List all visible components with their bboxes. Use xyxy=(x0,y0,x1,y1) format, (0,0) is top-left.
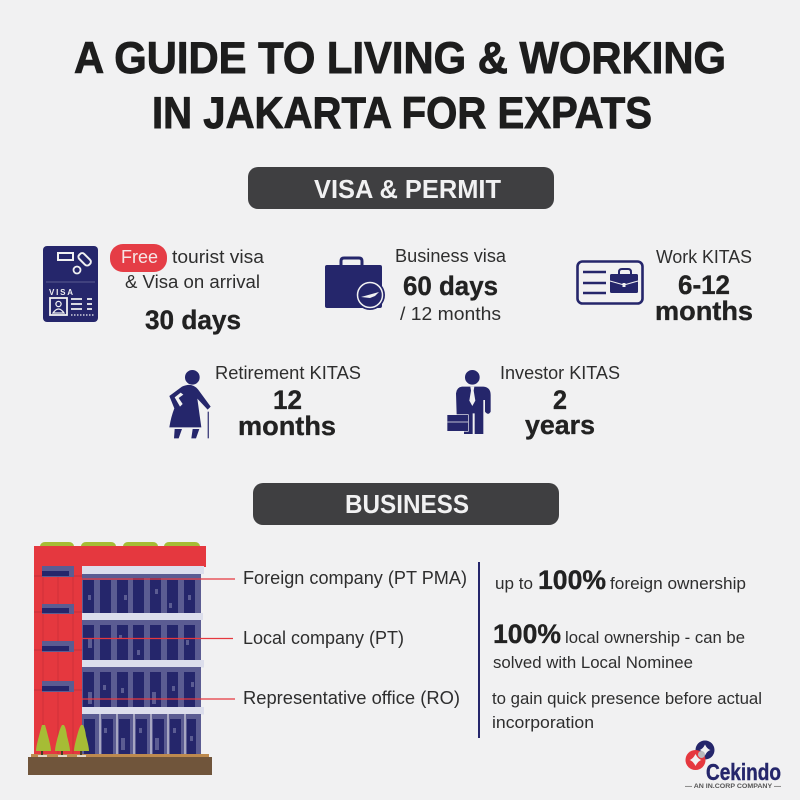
text block: work kitas: 6-12 xyxy=(678,270,730,300)
text block: local ownership xyxy=(493,619,745,672)
text block: representative office: to gain quick presence before actual xyxy=(492,689,762,708)
text block: investor kitas: Investor KITAS xyxy=(500,363,620,383)
text block: company types xyxy=(243,567,467,708)
heading: visa and permit xyxy=(248,167,554,209)
title xyxy=(74,34,726,138)
text block: free tourist visa: & Visa on arrival xyxy=(125,272,260,292)
text block: local ownership: local ownership - can be xyxy=(565,628,745,647)
text block: retirement kitas xyxy=(215,363,361,441)
text block: local ownership: solved with Local Nominee xyxy=(493,653,693,672)
divider xyxy=(478,562,480,738)
icon: work id card xyxy=(578,262,642,304)
text block: foreign ownership: 100% xyxy=(538,565,606,595)
text block: foreign ownership: foreign ownership xyxy=(610,574,746,593)
icon: visa passport: VISA xyxy=(49,288,73,297)
illustration: office building xyxy=(28,542,212,775)
text block: business visa: / 12 months xyxy=(400,304,501,324)
text block: retirement kitas: 12 xyxy=(273,385,302,415)
free badge xyxy=(110,244,167,272)
text block: representative office xyxy=(492,689,762,732)
text block: free tourist visa: 30 days xyxy=(145,305,241,335)
text block: company types: Representative office (RO) xyxy=(243,687,460,708)
text block: free tourist visa xyxy=(110,244,265,335)
text block: local ownership: 100% xyxy=(493,619,561,649)
heading: business xyxy=(253,483,559,525)
logo: cekindo: — AN IN.CORP COMPANY — xyxy=(685,784,781,790)
icon: visa passport xyxy=(43,246,98,322)
text block: foreign ownership: up to xyxy=(495,574,533,593)
title: IN JAKARTA FOR EXPATS xyxy=(152,89,652,138)
free badge: Free xyxy=(121,247,158,267)
icon: business suitcase xyxy=(325,258,385,310)
text block: company types: Foreign company (PT PMA) xyxy=(243,567,467,588)
text block: retirement kitas: Retirement KITAS xyxy=(215,363,361,383)
title: A GUIDE TO LIVING & WORKING xyxy=(74,34,726,83)
text block: work kitas xyxy=(655,247,753,326)
text block: investor kitas xyxy=(500,363,620,440)
text block: business visa xyxy=(395,246,507,324)
icon: retiree with cane xyxy=(169,370,211,438)
text block: free tourist visa: tourist visa xyxy=(172,247,265,267)
heading: visa and permit: VISA & PERMIT xyxy=(314,174,501,204)
text block: work kitas: months xyxy=(655,296,753,326)
text block: investor kitas: years xyxy=(525,410,595,440)
leader lines: building floors to labels xyxy=(82,579,235,699)
text block: investor kitas: 2 xyxy=(553,385,567,415)
text block: work kitas: Work KITAS xyxy=(656,247,752,267)
icon: investor with briefcase xyxy=(447,370,491,434)
logo mark xyxy=(686,740,714,770)
text block: foreign ownership xyxy=(495,565,746,595)
heading: business: BUSINESS xyxy=(345,489,469,519)
text block: representative office: incorporation xyxy=(492,713,594,732)
logo: cekindo: Cekindo xyxy=(706,759,781,785)
logo: cekindo xyxy=(685,740,781,790)
text block: company types: Local company (PT) xyxy=(243,627,404,648)
text block: business visa: 60 days xyxy=(403,271,498,301)
text block: business visa: Business visa xyxy=(395,246,507,266)
text block: retirement kitas: months xyxy=(238,411,336,441)
